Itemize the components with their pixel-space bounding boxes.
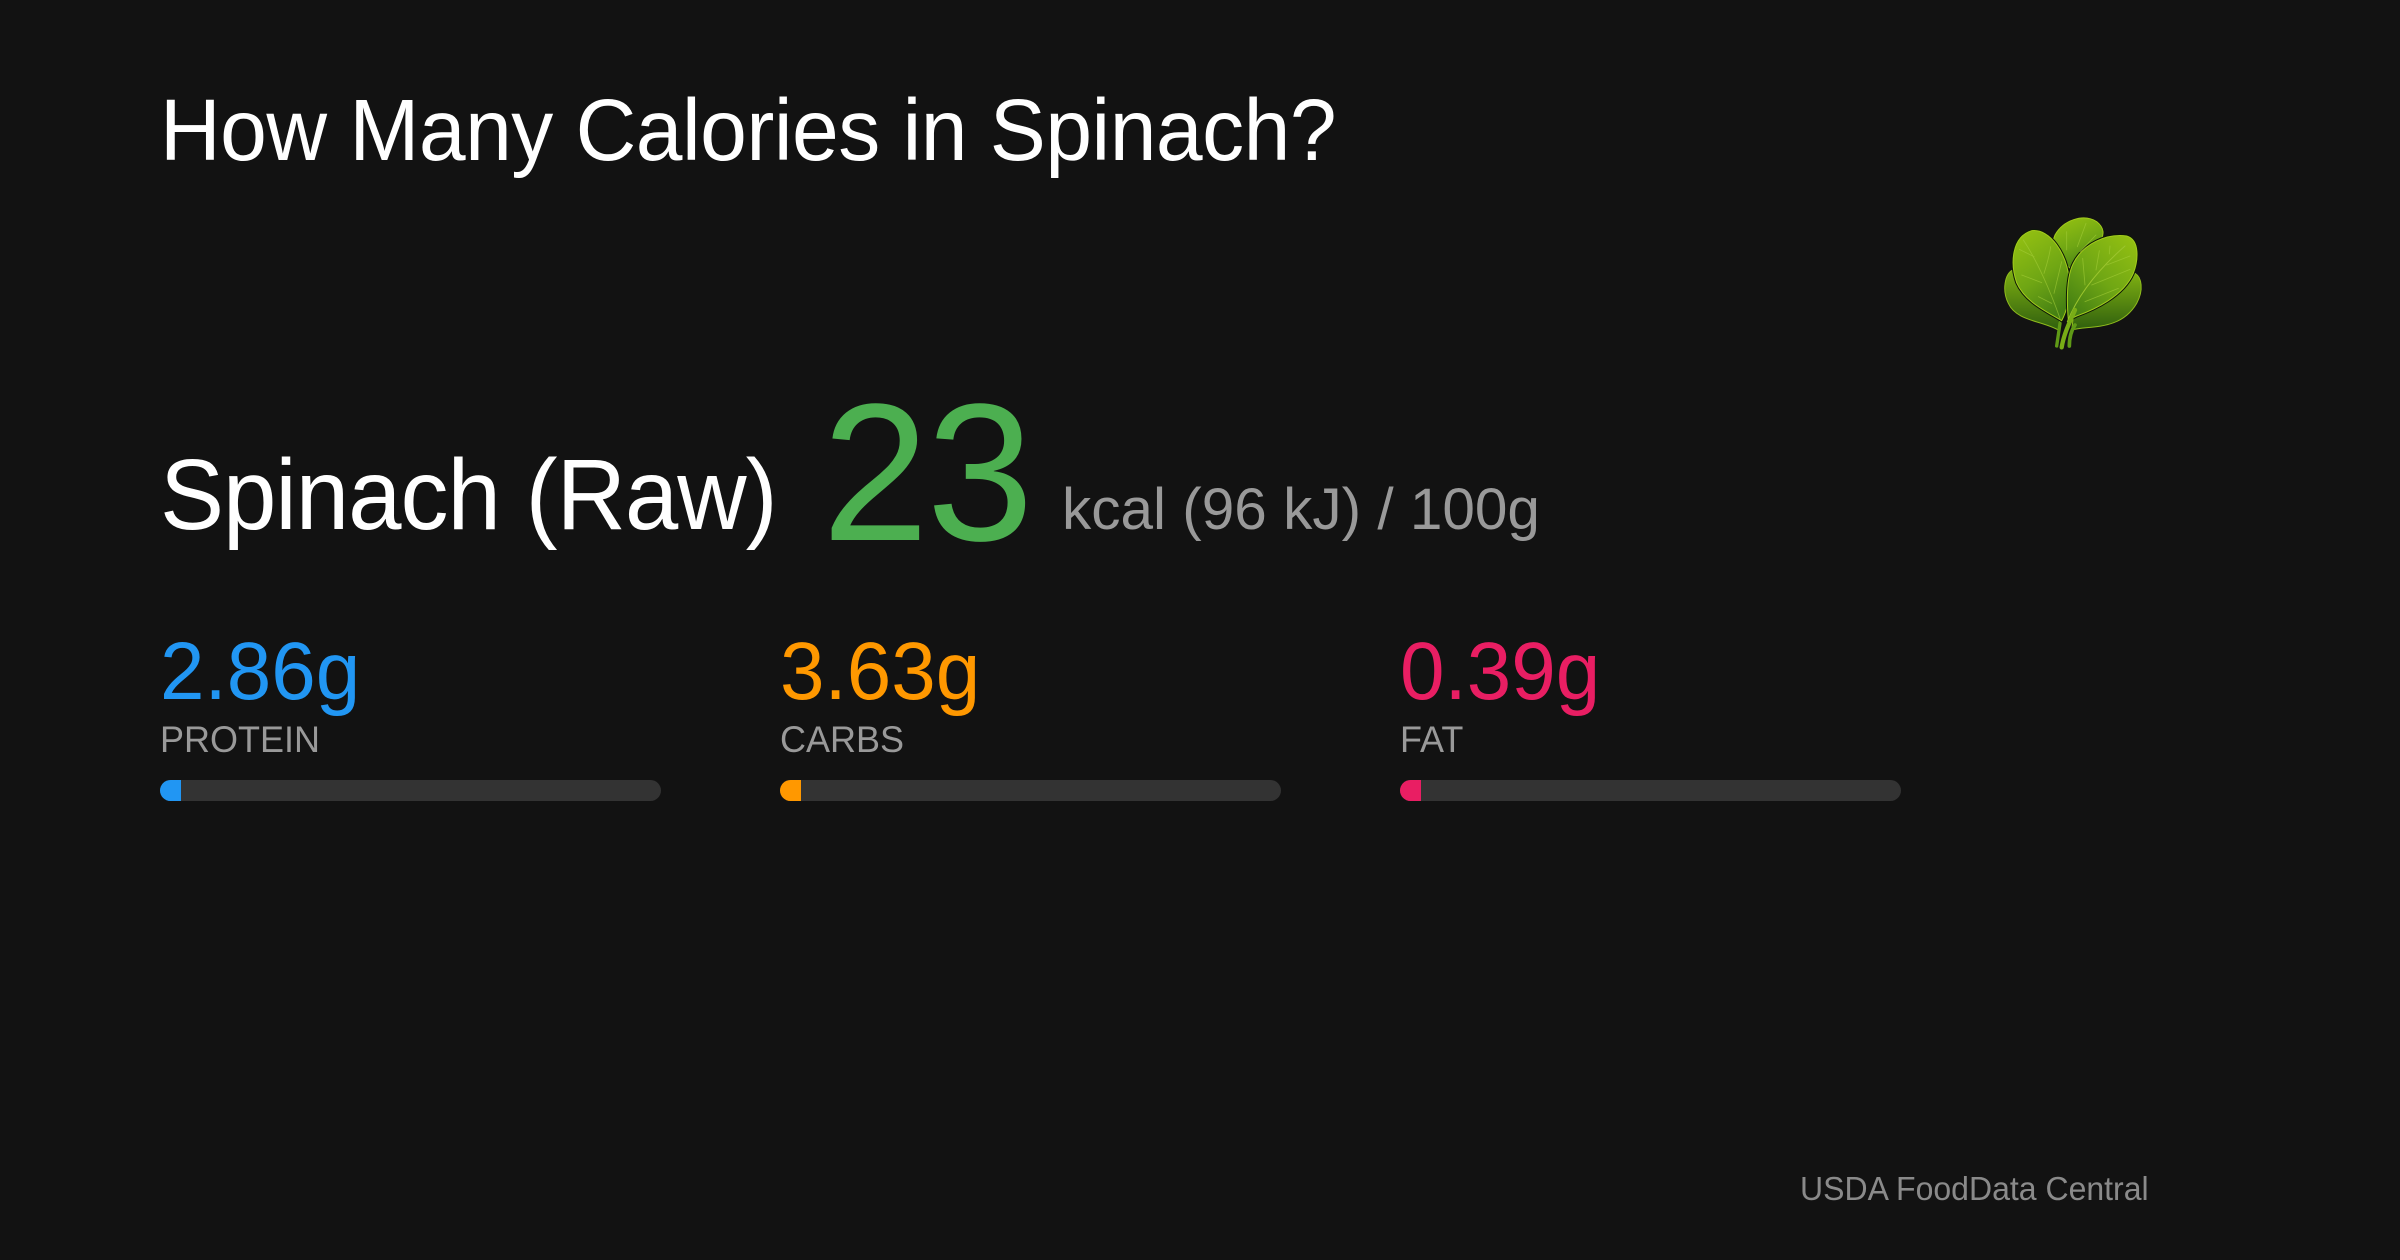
icon: spinach leaves [2004,217,2142,350]
title: How Many Calories in Spinach? [160,81,1336,179]
food name: Spinach (Raw) [160,440,777,551]
protein bar [160,780,661,801]
calorie unit: kcal (96 kJ) / 100g [1062,476,1540,542]
source credit: USDA FoodData Central [1800,1170,2149,1207]
fat value: 0.39g [1400,626,1600,716]
calorie value: 23 [822,362,1032,581]
carbs bar [780,780,1281,801]
front leaves [2013,231,2070,321]
protein value: 2.86g [160,626,360,716]
panel: protein [160,626,661,801]
panel: fat [1400,626,1901,801]
panel: carbs [780,626,1281,801]
carbs label: CARBS [780,717,904,760]
protein label: PROTEIN [160,717,320,760]
fat label: FAT [1400,717,1463,760]
back leaves [2005,270,2060,331]
fat bar [1400,780,1901,801]
carbs value: 3.63g [780,626,980,716]
